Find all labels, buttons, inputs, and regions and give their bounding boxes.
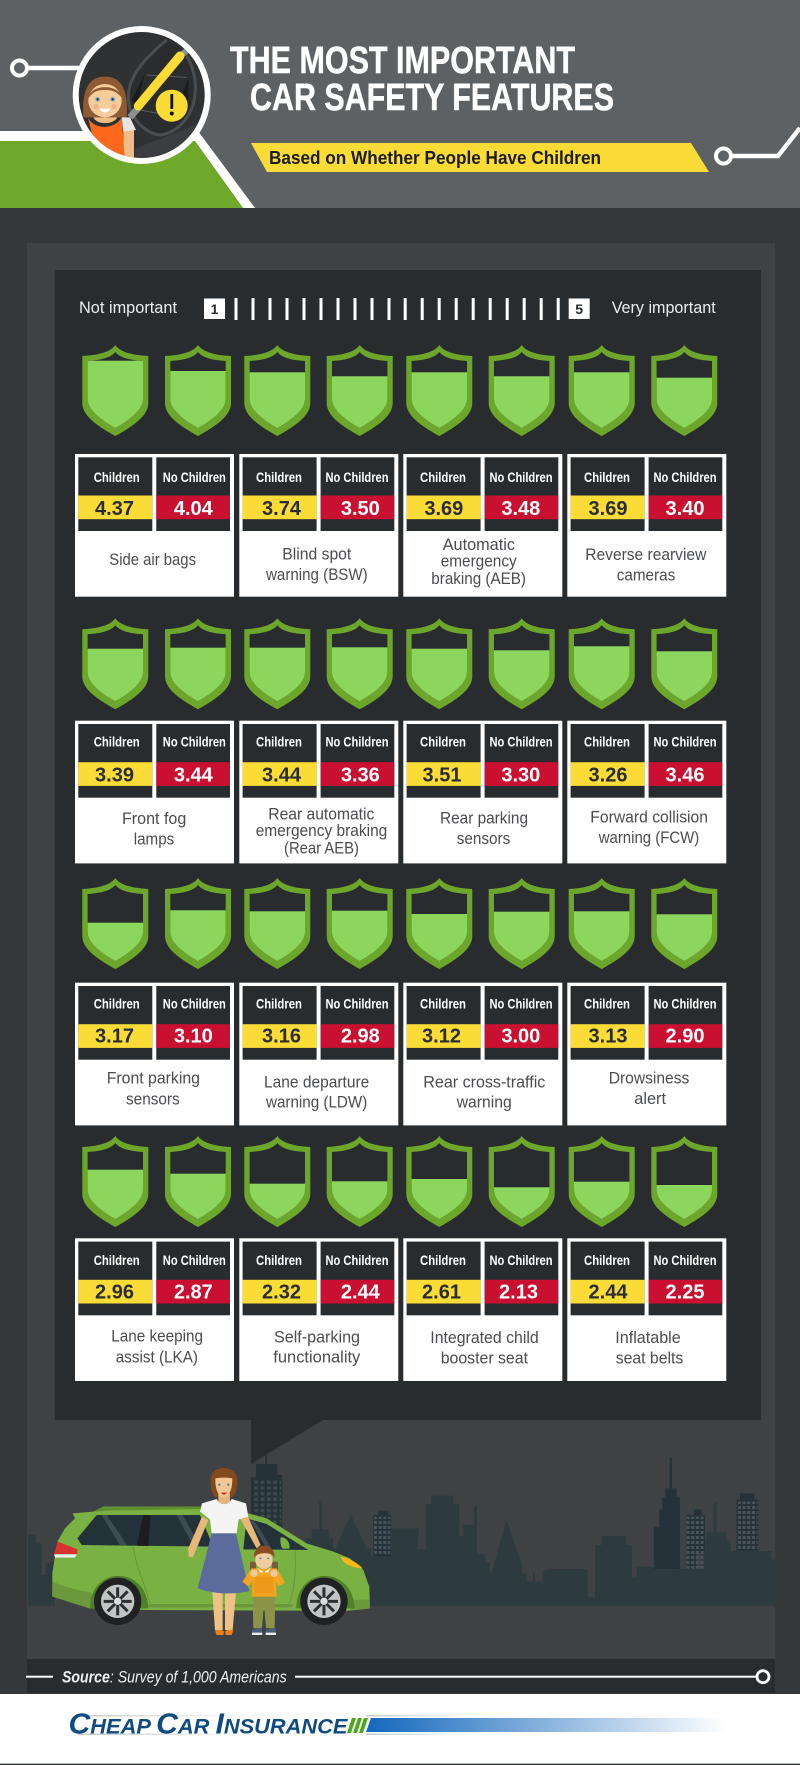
shield row 4 xyxy=(82,1136,718,1227)
card: Forward collision warning: 3.46 xyxy=(666,765,704,787)
card: Front parking sensors: sensors xyxy=(126,1089,180,1108)
tower behind mother xyxy=(251,1455,282,1533)
title: THE MOST IMPORTANT xyxy=(230,40,575,82)
card: Inflatable seat belts: Inflatable xyxy=(615,1328,681,1347)
card: Lane keeping assist: No Children xyxy=(163,1253,226,1268)
card: Integrated child booster seat: 2.61 xyxy=(422,1281,461,1303)
title: CAR SAFETY FEATURES xyxy=(250,77,614,119)
card: Inflatable seat belts: 2.44 xyxy=(589,1281,628,1303)
card: Drowsiness alert xyxy=(567,983,726,1125)
card: Rear automatic emergency braking: No Children xyxy=(326,735,388,750)
card: Rear cross-traffic warning: warning xyxy=(456,1093,512,1112)
card: Front fog lamps: 3.39 xyxy=(95,765,134,787)
card: Drowsiness alert: Children xyxy=(584,996,630,1011)
card: Front fog lamps: lamps xyxy=(134,829,174,848)
card: Automatic emergency braking: Automatic xyxy=(443,535,515,554)
card: Self-parking functionality: No Children xyxy=(326,1253,388,1268)
card: Rear cross-traffic warning: Rear cross-traffic xyxy=(423,1072,546,1091)
card: Side air bags: No Children xyxy=(163,470,226,485)
card: Front parking sensors xyxy=(75,983,234,1125)
card: Drowsiness alert: 2.90 xyxy=(666,1026,704,1048)
shield row 1 xyxy=(82,345,718,436)
card: Blind spot warning: Blind spot xyxy=(282,544,352,563)
card: Forward collision warning: Forward collision xyxy=(590,807,708,826)
windowed tower mid xyxy=(687,1502,705,1569)
card: Automatic emergency braking: No Children xyxy=(490,470,552,485)
child xyxy=(83,77,136,163)
importance scale xyxy=(79,298,716,320)
card: Rear parking sensors xyxy=(403,721,562,863)
card: Automatic emergency braking: emergency xyxy=(441,552,517,571)
card: Inflatable seat belts: 2.25 xyxy=(666,1281,704,1303)
card: Automatic emergency braking xyxy=(403,454,562,597)
windowed tower left xyxy=(373,1511,391,1557)
card: Front parking sensors: 3.10 xyxy=(174,1026,213,1048)
card: Side air bags: 4.37 xyxy=(95,498,134,520)
boy xyxy=(242,1546,285,1635)
card: Rear automatic emergency braking xyxy=(239,721,398,863)
card: Rear cross-traffic warning: Children xyxy=(420,996,466,1011)
card: Lane keeping assist: 2.87 xyxy=(174,1281,213,1303)
card: Rear cross-traffic warning: 3.12 xyxy=(422,1026,461,1048)
card: Rear automatic emergency braking: 3.36 xyxy=(341,765,380,787)
city skyline xyxy=(28,1455,775,1606)
card: Forward collision warning: warning (FCW) xyxy=(598,828,699,847)
card: Front parking sensors: No Children xyxy=(163,996,226,1011)
card: Integrated child booster seat: No Children xyxy=(490,1253,552,1268)
card: Automatic emergency braking: 3.48 xyxy=(501,498,540,520)
card: Automatic emergency braking: Children xyxy=(420,470,466,485)
card: Forward collision warning: Children xyxy=(584,735,630,750)
logo stripes xyxy=(347,1718,368,1733)
card: Automatic emergency braking: braking (AEB) xyxy=(431,569,526,588)
card: Integrated child booster seat: Integrated child xyxy=(430,1328,539,1347)
card: Self-parking functionality: Children xyxy=(256,1253,302,1268)
card: Side air bags xyxy=(75,454,234,597)
shield row 2 xyxy=(82,618,718,710)
logo xyxy=(68,1708,727,1740)
card: Reverse rearview cameras: No Children xyxy=(654,470,716,485)
subtitle ribbon xyxy=(251,143,709,172)
windowed tower right xyxy=(737,1493,758,1551)
roof rail xyxy=(93,1507,202,1512)
card: Lane keeping assist: Lane keeping xyxy=(111,1327,203,1346)
rear wheel xyxy=(90,1576,148,1625)
logo wordmark: CHEAP CAR INSURANCE xyxy=(68,1708,349,1740)
scale label high: Very important xyxy=(612,299,716,317)
mirror xyxy=(280,1537,290,1549)
card: Drowsiness alert: 3.13 xyxy=(589,1026,627,1048)
card: Self-parking functionality: 2.32 xyxy=(262,1281,301,1303)
card: Forward collision warning: No Children xyxy=(654,735,716,750)
card: Self-parking functionality: 2.44 xyxy=(341,1281,381,1303)
source text: Source: Survey of 1,000 Americans xyxy=(62,1668,287,1687)
header band xyxy=(0,0,800,208)
front wheel xyxy=(296,1576,355,1625)
card: Rear automatic emergency braking: emergency braking xyxy=(256,821,387,840)
icon: warning exclamation xyxy=(156,90,188,122)
card: Rear automatic emergency braking: Rear automatic xyxy=(268,804,375,823)
card: Drowsiness alert: alert xyxy=(634,1089,666,1108)
card: Integrated child booster seat: booster seat xyxy=(441,1348,528,1367)
right circuit node xyxy=(716,128,800,164)
scale box 5 xyxy=(569,298,590,319)
shield row 3 xyxy=(82,878,718,969)
card: Reverse rearview cameras: 3.40 xyxy=(666,498,704,520)
card: Side air bags: 4.04 xyxy=(174,498,214,520)
card: Rear parking sensors: sensors xyxy=(457,829,510,848)
card: Blind spot warning: warning (BSW) xyxy=(265,565,368,584)
head light xyxy=(341,1557,363,1569)
card: Front parking sensors: Children xyxy=(94,996,140,1011)
card: Integrated child booster seat: 2.13 xyxy=(499,1281,538,1303)
mother xyxy=(188,1468,261,1635)
subtitle ribbon: Based on Whether People Have Children xyxy=(269,148,601,168)
card: Inflatable seat belts: Children xyxy=(584,1253,630,1268)
card: Self-parking functionality: Self-parking xyxy=(274,1327,360,1346)
card: Reverse rearview cameras: Children xyxy=(584,470,630,485)
card: Rear automatic emergency braking: Children xyxy=(256,735,302,750)
card: Front parking sensors: Front parking xyxy=(107,1068,200,1087)
card: Drowsiness alert: No Children xyxy=(654,996,716,1011)
spire tower xyxy=(654,1458,680,1569)
windows xyxy=(77,1515,213,1547)
card: Side air bags: Children xyxy=(94,470,140,485)
card: Lane departure warning: 2.98 xyxy=(341,1026,380,1048)
scale ticks xyxy=(234,298,560,320)
card: Rear cross-traffic warning: 3.00 xyxy=(501,1026,540,1048)
scale box 1: 1 xyxy=(211,301,219,317)
card: Lane departure warning xyxy=(239,983,398,1125)
card: Rear cross-traffic warning xyxy=(403,983,562,1125)
scale box 1 xyxy=(204,298,225,319)
lower body shade xyxy=(52,1582,370,1611)
card: Lane departure warning: 3.16 xyxy=(262,1026,301,1048)
minivan xyxy=(52,1507,370,1625)
card: Rear cross-traffic warning: No Children xyxy=(490,996,552,1011)
card: Integrated child booster seat xyxy=(403,1238,562,1381)
card: Inflatable seat belts: No Children xyxy=(654,1253,716,1268)
card: Lane keeping assist: assist (LKA) xyxy=(116,1347,198,1366)
card: Front fog lamps: 3.44 xyxy=(174,765,214,787)
card: Inflatable seat belts: seat belts xyxy=(616,1348,683,1367)
scale label low: Not important xyxy=(79,299,177,317)
card: Blind spot warning: Children xyxy=(256,470,302,485)
card: Lane keeping assist xyxy=(75,1238,234,1381)
card: Side air bags: Side air bags xyxy=(109,550,196,569)
card: Lane departure warning: No Children xyxy=(326,996,388,1011)
title xyxy=(230,40,614,119)
card: Lane departure warning: Children xyxy=(256,996,302,1011)
card: Integrated child booster seat: Children xyxy=(420,1253,466,1268)
card: Reverse rearview cameras: Reverse rearview xyxy=(585,545,707,564)
card: Automatic emergency braking: 3.69 xyxy=(424,498,463,520)
card: Self-parking functionality xyxy=(239,1238,398,1381)
card: Reverse rearview cameras: cameras xyxy=(617,566,675,585)
tail light xyxy=(54,1542,77,1554)
outer panel xyxy=(27,243,775,1659)
card: Blind spot warning: No Children xyxy=(326,470,388,485)
green road shape xyxy=(0,131,255,208)
seat xyxy=(128,40,207,160)
card: Front parking sensors: 3.17 xyxy=(95,1026,134,1048)
logo gradient bar xyxy=(366,1718,727,1732)
card: Forward collision warning: 3.26 xyxy=(589,765,627,787)
source bar xyxy=(26,1659,775,1693)
card: Forward collision warning xyxy=(567,721,726,863)
card: Self-parking functionality: functionality xyxy=(273,1348,361,1367)
seat belt xyxy=(130,49,188,117)
main dark panel xyxy=(55,270,761,1464)
card: Rear parking sensors: 3.51 xyxy=(423,765,461,787)
card: Rear parking sensors: Rear parking xyxy=(440,808,528,827)
card: Front fog lamps: No Children xyxy=(163,735,226,750)
footer xyxy=(0,1694,800,1765)
card: Front fog lamps: Children xyxy=(94,735,140,750)
card: Reverse rearview cameras: 3.69 xyxy=(589,498,627,520)
card: Blind spot warning: 3.50 xyxy=(341,498,380,520)
card: Lane departure warning: warning (LDW) xyxy=(265,1093,367,1112)
card: Rear parking sensors: Children xyxy=(420,735,466,750)
card: Lane keeping assist: 2.96 xyxy=(95,1281,134,1303)
scale box 5: 5 xyxy=(575,301,583,317)
card: Lane departure warning: Lane departure xyxy=(264,1072,369,1091)
card: Rear automatic emergency braking: (Rear AEB) xyxy=(284,838,359,857)
card: Rear parking sensors: 3.30 xyxy=(501,765,540,787)
card: Drowsiness alert: Drowsiness xyxy=(609,1068,689,1087)
card: Blind spot warning xyxy=(239,454,398,597)
card: Front fog lamps: Front fog xyxy=(122,809,186,828)
card: Inflatable seat belts xyxy=(567,1238,726,1381)
card: Front fog lamps xyxy=(75,721,234,863)
van body xyxy=(52,1507,370,1611)
card: Rear parking sensors: No Children xyxy=(490,735,552,750)
left circuit node xyxy=(12,60,82,76)
card: Blind spot warning: 3.74 xyxy=(262,498,302,520)
card: Lane keeping assist: Children xyxy=(94,1253,140,1268)
card: Rear automatic emergency braking: 3.44 xyxy=(262,765,302,787)
icon: magnifying lens with child and seat belt warning xyxy=(73,26,211,164)
card: Reverse rearview cameras xyxy=(567,454,726,597)
